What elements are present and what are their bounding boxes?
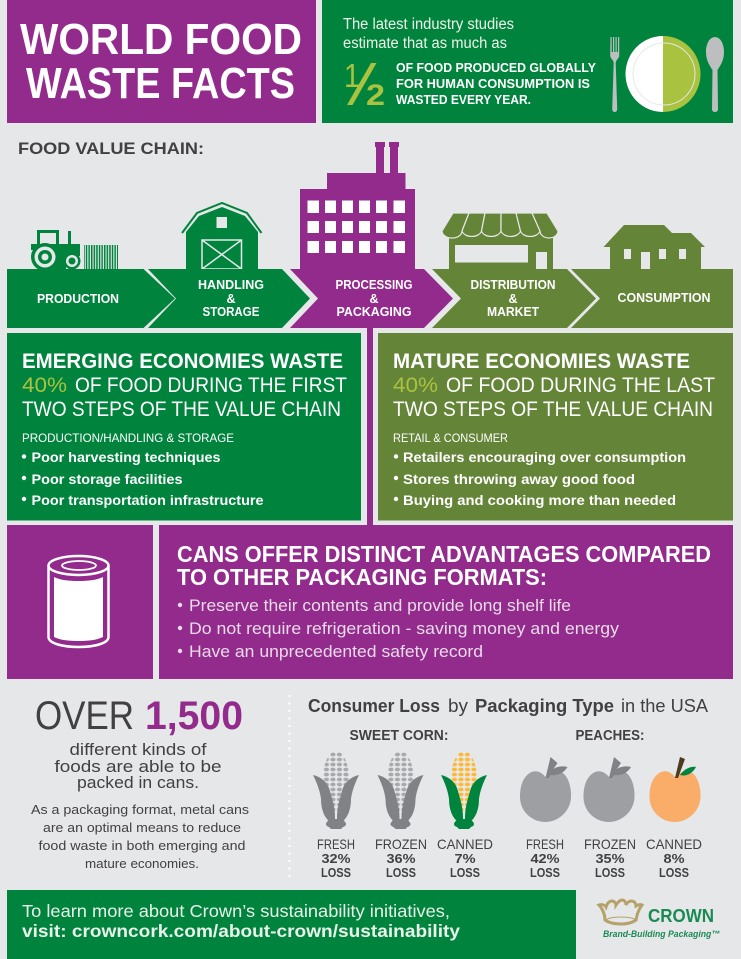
panel: footer call to action bbox=[7, 890, 576, 959]
icon: barn bbox=[182, 203, 262, 269]
labels: peach frozen: FROZEN bbox=[584, 836, 636, 852]
labels: corn frozen: 36% bbox=[386, 851, 416, 866]
one half fraction bbox=[344, 57, 385, 112]
arrow: distribution and market: MARKET bbox=[487, 305, 539, 319]
intro text: The latest industry studies bbox=[343, 16, 514, 33]
one half fraction: 2 bbox=[366, 79, 385, 112]
arrow: consumption bbox=[571, 269, 733, 328]
labels: corn canned bbox=[437, 836, 493, 880]
arrow: distribution and market: DISTRIBUTION bbox=[470, 278, 556, 292]
icon: factory bbox=[300, 142, 415, 269]
heading: consumer loss: Packaging Type bbox=[475, 695, 614, 716]
bullet list: Poor storage facilities bbox=[32, 471, 183, 487]
arrow: distribution and market: & bbox=[508, 292, 518, 306]
panel: can icon bbox=[7, 525, 153, 679]
text: metal cans note: As a packaging format, metal cans bbox=[31, 802, 250, 817]
heading: consumer loss: Consumer Loss bbox=[308, 695, 440, 716]
heading: EMERGING ECONOMIES WASTE bbox=[22, 349, 343, 373]
labels: corn fresh bbox=[317, 836, 355, 880]
half statement: OF FOOD PRODUCED GLOBALLY bbox=[396, 61, 597, 75]
labels: corn frozen bbox=[375, 836, 427, 880]
labels: peach frozen: LOSS bbox=[595, 865, 625, 880]
intro text: estimate that as much as bbox=[343, 35, 507, 52]
heading: 40% bbox=[22, 373, 67, 397]
labels: corn fresh: FRESH bbox=[317, 836, 355, 852]
heading: consumer loss: by bbox=[448, 695, 469, 716]
arrow: processing and packaging: PACKAGING bbox=[336, 305, 412, 319]
stat: over 1,500: 1,500 bbox=[145, 694, 243, 738]
bullet list bbox=[178, 597, 620, 661]
arrow: production bbox=[7, 269, 175, 328]
panel: footer call to action: visit: crowncork.com/about-crown/sustainability bbox=[22, 921, 460, 941]
arrow: handling and storage: & bbox=[226, 292, 236, 306]
stat: over 1,500 bbox=[35, 694, 243, 738]
arrow: handling and storage: STORAGE bbox=[202, 305, 260, 319]
text: metal cans note bbox=[31, 802, 250, 871]
icon: tractor bbox=[31, 230, 118, 271]
heading: food value chain: FOOD VALUE CHAIN: bbox=[18, 139, 204, 158]
heading: consumer loss bbox=[308, 695, 709, 716]
text: kinds of foods bbox=[54, 740, 221, 792]
icon: corn canned bbox=[441, 751, 487, 829]
heading: OF FOOD DURING THE FIRST bbox=[75, 373, 347, 397]
value chain: purple connector bbox=[367, 328, 373, 526]
arrow: consumption: CONSUMPTION bbox=[618, 291, 710, 305]
title: WORLD FOOD bbox=[20, 15, 302, 64]
heading: consumer loss: in the USA bbox=[621, 695, 709, 716]
panel: cans advantages bbox=[159, 525, 733, 679]
half statement bbox=[396, 61, 597, 107]
subheading: RETAIL & CONSUMER bbox=[393, 431, 508, 445]
labels: peach canned bbox=[646, 836, 702, 880]
icon: plate bbox=[626, 36, 700, 112]
arrow: processing and packaging: PROCESSING bbox=[336, 278, 412, 292]
heading: sweet corn: SWEET CORN: bbox=[350, 728, 448, 744]
heading bbox=[22, 349, 347, 421]
icon: corn frozen bbox=[378, 751, 424, 829]
title bbox=[20, 15, 302, 108]
labels: peach frozen bbox=[584, 836, 636, 880]
logo: crown: Brand-Building Packaging™ bbox=[603, 929, 720, 939]
labels: peach canned: LOSS bbox=[659, 865, 689, 880]
half statement: FOR HUMAN CONSUMPTION IS bbox=[396, 77, 590, 91]
heading: TWO STEPS OF THE VALUE CHAIN bbox=[22, 397, 341, 421]
icon: corn fresh bbox=[313, 751, 359, 829]
labels: peach canned: CANNED bbox=[646, 836, 702, 852]
panel: emerging economies bbox=[7, 333, 361, 520]
title panel bbox=[7, 0, 316, 123]
panel: footer call to action: To learn more about Crown’s sustainability initiatives, bbox=[22, 901, 450, 921]
heading bbox=[177, 541, 711, 590]
labels: peach fresh bbox=[526, 836, 564, 880]
bullet list: Poor transportation infrastructure bbox=[32, 492, 264, 508]
bullet list: Buying and cooking more than needed bbox=[403, 492, 676, 508]
icon: can bbox=[48, 556, 108, 647]
bullet list: Stores throwing away good food bbox=[403, 471, 635, 487]
bullet list: Poor harvesting techniques bbox=[32, 449, 221, 465]
heading: OF FOOD DURING THE LAST bbox=[446, 373, 715, 397]
icon: peach fresh bbox=[520, 757, 571, 822]
heading: MATURE ECONOMIES WASTE bbox=[393, 349, 690, 373]
labels: corn frozen: LOSS bbox=[386, 865, 416, 880]
icon: peach frozen bbox=[584, 757, 635, 822]
text: kinds of foods: different kinds of bbox=[70, 740, 207, 759]
arrow: distribution and market bbox=[432, 269, 596, 328]
panel: half of food wasted bbox=[322, 0, 733, 123]
icon: market bbox=[442, 213, 558, 269]
title: WASTE FACTS bbox=[26, 59, 295, 108]
arrow: handling and storage bbox=[148, 269, 310, 328]
icon: fork bbox=[610, 37, 619, 112]
icon: crown bbox=[599, 900, 642, 924]
labels: peach frozen: 35% bbox=[596, 851, 625, 866]
text: metal cans note: are an optimal means to reduce bbox=[43, 820, 241, 835]
text: kinds of foods: packed in cans. bbox=[77, 773, 199, 792]
subheading: PRODUCTION/HANDLING & STORAGE bbox=[22, 431, 234, 445]
heading bbox=[393, 349, 715, 421]
icon: house bbox=[604, 225, 705, 269]
bullet list bbox=[22, 449, 264, 508]
panel: mature economies bbox=[378, 333, 733, 520]
labels: corn canned: 7% bbox=[454, 851, 476, 866]
arrow: handling and storage: HANDLING bbox=[198, 278, 264, 292]
labels: corn canned: LOSS bbox=[450, 865, 480, 880]
text: metal cans note: food waste in both emerging and bbox=[38, 838, 246, 853]
labels: corn frozen: FROZEN bbox=[375, 836, 427, 852]
bullet list: Preserve their contents and provide long shelf life bbox=[189, 597, 571, 615]
arrow: processing and packaging: & bbox=[369, 292, 379, 306]
logo: crown: CROWN bbox=[648, 905, 714, 926]
icon: peach canned bbox=[650, 757, 701, 822]
labels: corn fresh: LOSS bbox=[321, 865, 351, 880]
labels: corn fresh: 32% bbox=[322, 851, 351, 866]
heading: CANS OFFER DISTINCT ADVANTAGES COMPARED bbox=[177, 541, 711, 567]
labels: peach canned: 8% bbox=[664, 851, 685, 866]
text: kinds of foods: foods are able to be bbox=[54, 757, 221, 776]
labels: peach fresh: FRESH bbox=[526, 836, 564, 852]
bullet list: Retailers encouraging over consumption bbox=[403, 449, 686, 465]
bullet list: Have an unprecedented safety record bbox=[189, 643, 483, 661]
heading: 40% bbox=[393, 373, 438, 397]
icon: spoon bbox=[706, 37, 724, 112]
bullet list: Do not require refrigeration - saving money and energy bbox=[189, 620, 620, 638]
labels: peach fresh: LOSS bbox=[530, 865, 560, 880]
bullet list bbox=[394, 449, 686, 508]
half statement: WASTED EVERY YEAR. bbox=[396, 93, 531, 107]
labels: corn canned: CANNED bbox=[437, 836, 493, 852]
arrow: production: PRODUCTION bbox=[37, 292, 119, 306]
text: metal cans note: mature economies. bbox=[85, 856, 199, 871]
heading: peaches: PEACHES: bbox=[576, 728, 644, 744]
intro text bbox=[343, 16, 514, 52]
arrow: processing and packaging bbox=[290, 269, 453, 328]
labels: peach fresh: 42% bbox=[530, 851, 560, 866]
one half fraction: 1 bbox=[344, 57, 360, 94]
heading: TO OTHER PACKAGING FORMATS: bbox=[177, 564, 547, 590]
logo: crown bbox=[599, 900, 720, 939]
stat: over 1,500: OVER bbox=[35, 694, 134, 738]
